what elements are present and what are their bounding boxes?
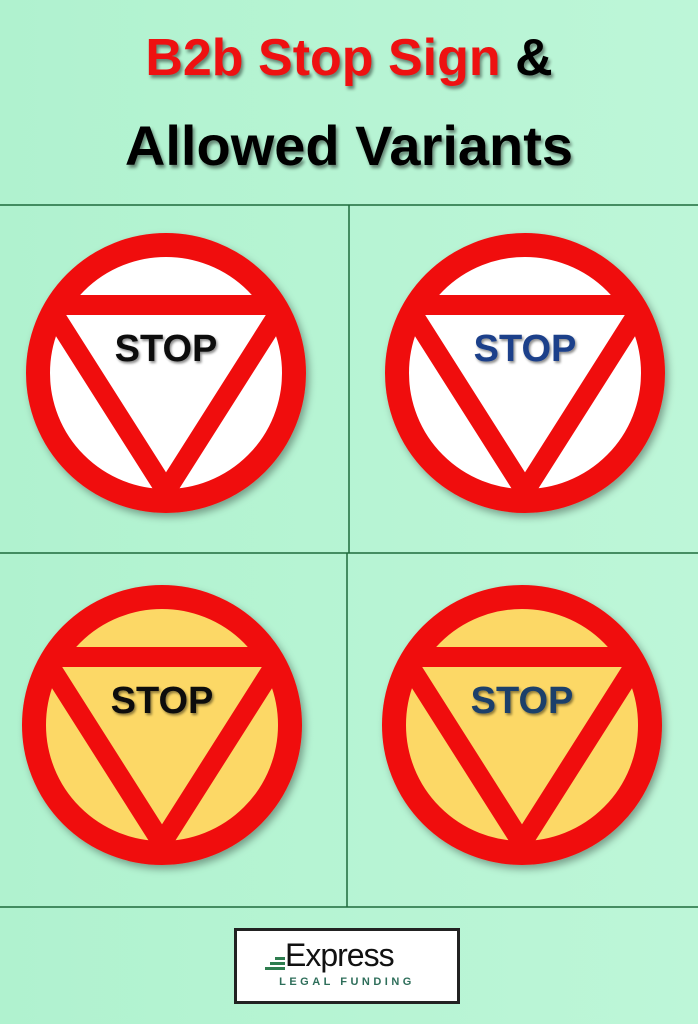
logo: Express Legal Funding xyxy=(234,928,460,1004)
title: B2b Stop Sign & xyxy=(145,29,553,87)
logo: Express Legal Funding: Express xyxy=(285,937,394,973)
sign: yellow black text: STOP xyxy=(111,680,213,722)
sign: yellow blue text xyxy=(394,597,650,853)
sign: white black text xyxy=(38,245,294,501)
sign grid xyxy=(0,204,698,908)
sign: white black text: STOP xyxy=(115,328,217,370)
sign: white blue text xyxy=(397,245,653,501)
title: Allowed Variants xyxy=(125,114,573,177)
sign: yellow black text xyxy=(34,597,290,853)
sign: white blue text: STOP xyxy=(474,328,576,370)
title xyxy=(125,29,575,177)
sign: yellow blue text: STOP xyxy=(471,680,573,722)
logo: Express Legal Funding: LEGAL FUNDING xyxy=(279,976,415,988)
